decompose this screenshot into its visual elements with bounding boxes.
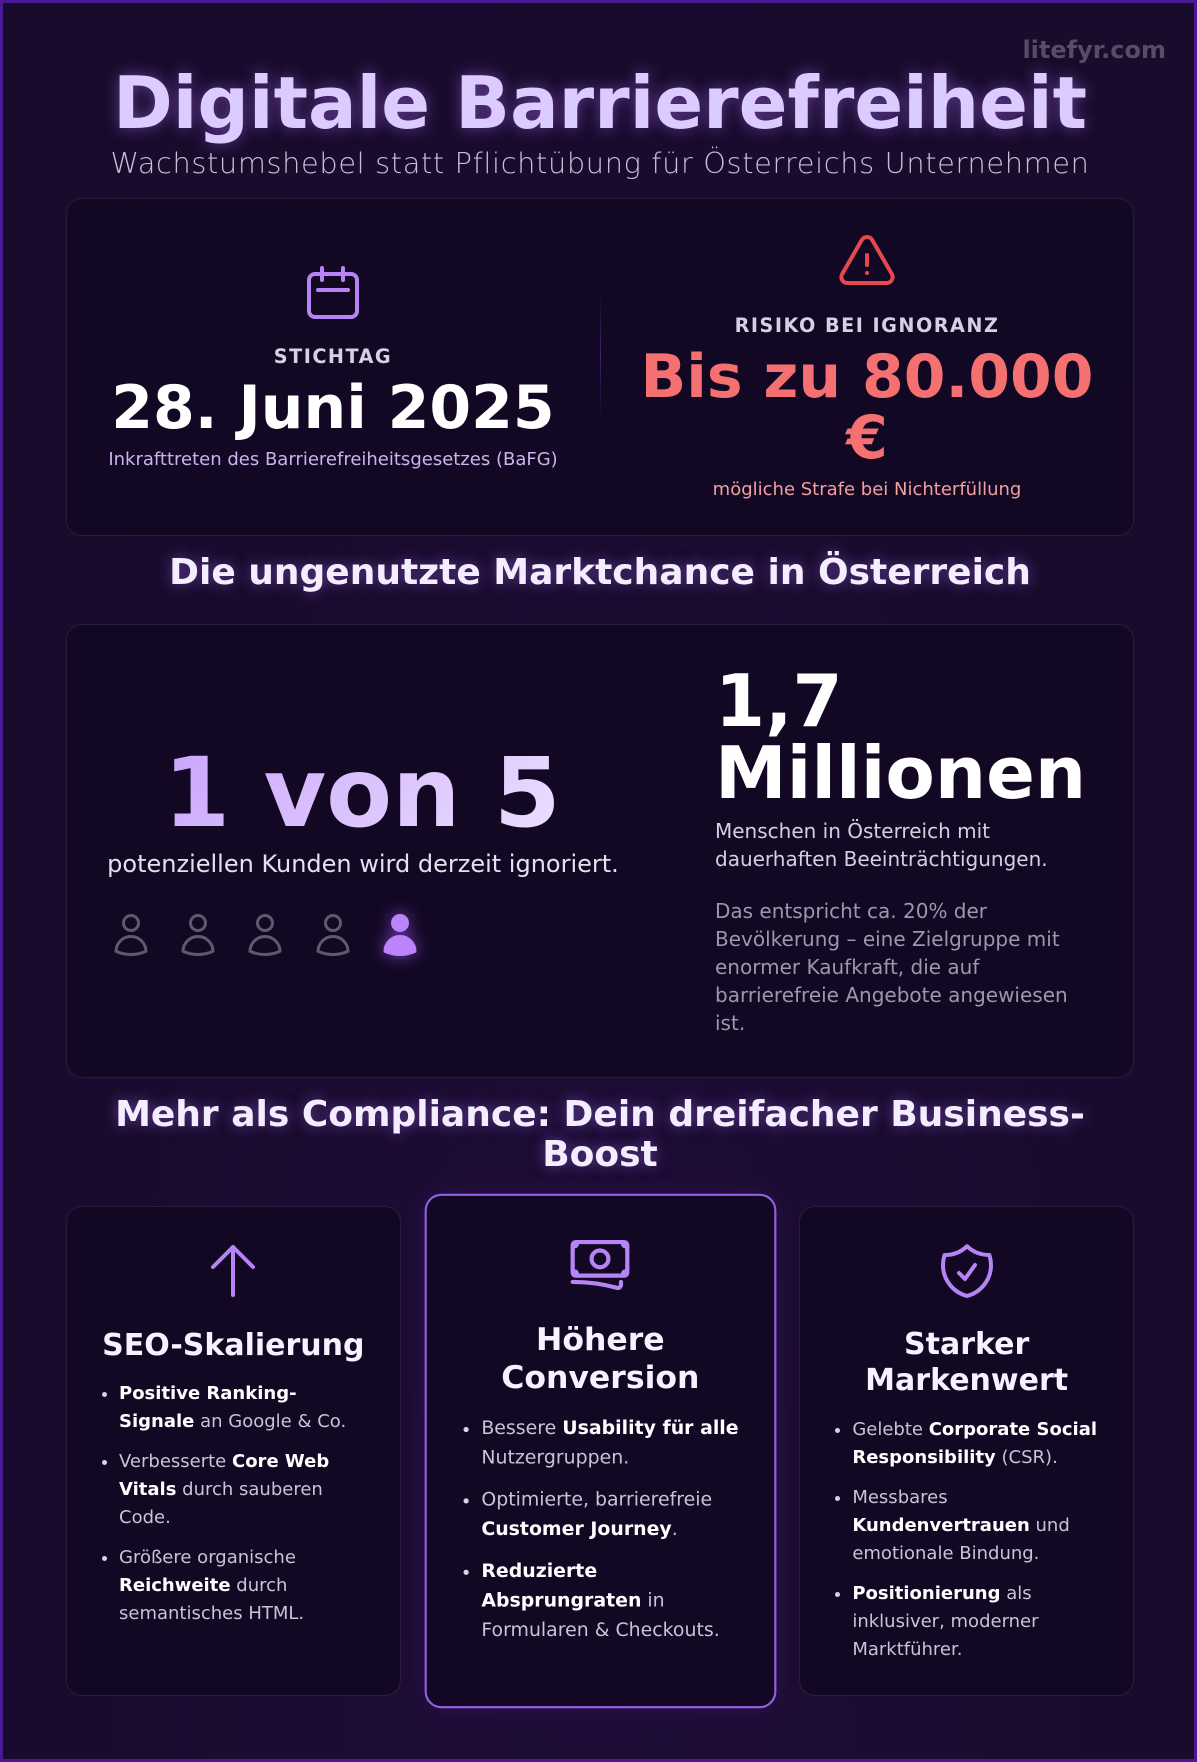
bullet list: Messbares (852, 1487, 948, 1508)
bullet list: emotionale Bindung. (852, 1543, 1039, 1564)
penalty amount: Bis zu 80.000 (641, 342, 1093, 412)
penalty amount: € (846, 402, 888, 472)
label: risiko: RISIKO BEI IGNORANZ (735, 314, 999, 337)
icon: shield check (941, 1244, 993, 1298)
bullet list: Bessere Usability für alle (481, 1417, 738, 1439)
stat description (715, 819, 1048, 871)
panel: brand value card (799, 1206, 1134, 1696)
bullet list: Reichweite durch (119, 1575, 287, 1596)
card heading: Starker (904, 1327, 1029, 1362)
stat description: dauerhaften Beeinträchtigungen. (715, 847, 1048, 871)
bullet list: Positionierung als (852, 1583, 1032, 1604)
penalty amount (641, 342, 1093, 472)
icon: arrow up (210, 1244, 256, 1297)
bullet list: Nutzergruppen. (481, 1447, 629, 1469)
bullet list: Größere organische (119, 1547, 296, 1568)
card heading: Höhere (536, 1322, 664, 1359)
date: 28. Juni 2025 (111, 373, 555, 443)
divider (600, 289, 601, 419)
bullet list: Kundenvertrauen und (852, 1515, 1070, 1536)
icon: banknotes (570, 1240, 630, 1290)
penalty description: mögliche Strafe bei Nichterfüllung (713, 479, 1021, 500)
stat: 1,7 Millionen (715, 659, 1086, 815)
stat detail: barrierefreie Angebote angewiesen (715, 983, 1068, 1007)
bullet list: Customer Journey. (481, 1518, 677, 1540)
bullet list: Responsibility (CSR). (852, 1447, 1058, 1468)
card heading: SEO-Skalierung (102, 1328, 364, 1363)
card heading (501, 1322, 699, 1396)
stat detail: enormer Kaufkraft, die auf (715, 955, 979, 979)
date description: Inkrafttreten des Barrierefreiheitsgesetzes (BaFG) (108, 449, 558, 470)
stat: 1 von 5: 1 von 5 (163, 737, 561, 849)
bullet list: Absprungraten in (481, 1590, 664, 1612)
bullet list: Verbesserte Core Web (119, 1451, 329, 1472)
stat: 1,7 Millionen: 1,7 (715, 659, 843, 743)
card heading (865, 1327, 1068, 1398)
stat detail: ist. (715, 1011, 745, 1035)
card heading: Markenwert (865, 1363, 1068, 1398)
watermark: litefyr.com (1022, 36, 1166, 64)
heading: business boost: Mehr als Compliance: Dein dreifacher Business- (115, 1094, 1085, 1135)
heading: business boost: Boost (542, 1134, 658, 1175)
panel: deadline and risk (66, 198, 1134, 536)
label: stichtag: STICHTAG (274, 345, 392, 368)
stat: 1,7 Millionen: Millionen (715, 731, 1086, 815)
stat detail: Das entspricht ca. 20% der (715, 899, 987, 923)
bullet list (464, 1417, 738, 1641)
panel: conversion card (424, 1194, 776, 1708)
panel: SEO card (66, 1206, 401, 1696)
icon: calendar (307, 266, 359, 319)
bullet list: Vitals durch sauberen (119, 1479, 323, 1500)
stat detail (715, 899, 1068, 1035)
heading: market opportunity: Die ungenutzte Marktchance in Österreich (169, 552, 1031, 593)
panel: market numbers (66, 624, 1134, 1078)
card heading: Conversion (501, 1360, 699, 1396)
stat description: Menschen in Österreich mit (715, 819, 990, 843)
bullet list: Signale an Google & Co. (119, 1411, 346, 1432)
icon: warning triangle (839, 235, 895, 285)
subtitle: Wachstumshebel statt Pflichtübung für Österreichs Unternehmen (110, 146, 1090, 180)
stat detail: Bevölkerung – eine Zielgruppe mit (715, 927, 1060, 951)
stat caption: potenziellen Kunden wird derzeit ignoriert. (107, 850, 619, 878)
bullet list: Marktführer. (852, 1639, 962, 1660)
bullet list (835, 1419, 1097, 1660)
title: Digitale Barrierefreiheit (113, 61, 1087, 145)
bullet list: Gelebte Corporate Social (852, 1419, 1097, 1440)
bullet list: inklusiver, moderner (852, 1611, 1039, 1632)
bullet list: Positive Ranking- (119, 1383, 297, 1404)
bullet list: Formularen & Checkouts. (481, 1619, 719, 1641)
bullet list (102, 1383, 346, 1624)
bullet list: semantisches HTML. (119, 1603, 304, 1624)
bullet list: Reduzierte (481, 1560, 597, 1582)
icon row: people (114, 904, 426, 967)
bullet list: Code. (119, 1507, 171, 1528)
bullet list: Optimierte, barrierefreie (481, 1489, 712, 1511)
heading: business boost (110, 1092, 1086, 1175)
